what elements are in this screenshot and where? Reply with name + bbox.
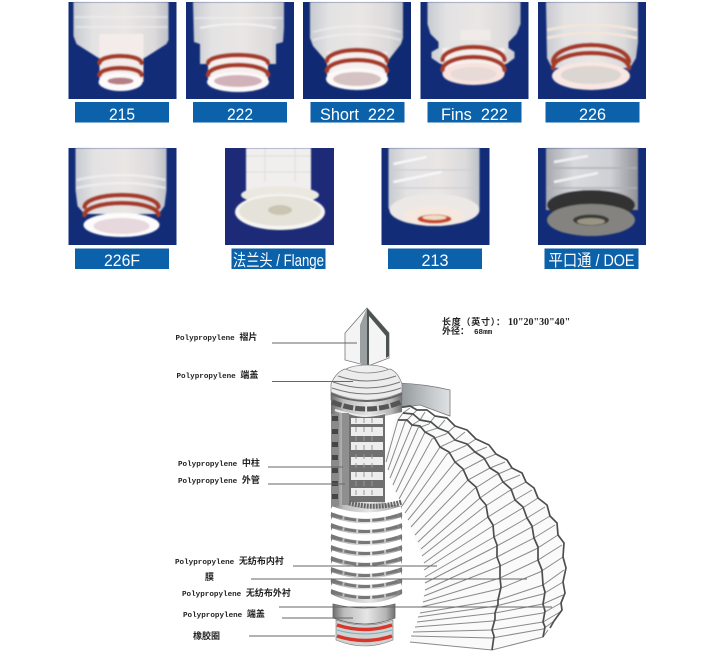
fin tip xyxy=(345,308,389,366)
photo: 226F end cap xyxy=(68,148,176,245)
leader lines xyxy=(249,343,552,636)
label: membrane: 膜 xyxy=(205,570,214,583)
label: 215: 215 xyxy=(109,106,135,124)
label: top end cap: Polypropylene 端盖 xyxy=(176,368,258,381)
label: 222 xyxy=(193,102,287,124)
label: 226F: 226F xyxy=(104,252,140,270)
label: Flange xyxy=(232,248,326,270)
label: 215 xyxy=(75,102,169,124)
photo: Fins 222 end cap xyxy=(420,2,528,99)
label: 226 xyxy=(546,102,640,124)
photo: 213 end cap xyxy=(382,148,490,245)
cage stripes xyxy=(331,502,402,598)
specification note: 68mm xyxy=(474,329,493,337)
cartridge core xyxy=(331,308,402,646)
cutaway center core xyxy=(349,414,385,502)
label: 226: 226 xyxy=(579,106,606,124)
label: 213: 213 xyxy=(422,252,448,270)
o-rings xyxy=(336,620,393,646)
label: Fins 222 xyxy=(428,102,522,124)
specification note xyxy=(442,315,570,337)
specification note: 10"20"30"40" xyxy=(508,317,570,328)
label: Flange: 法兰头 / Flange xyxy=(233,251,324,270)
label: center core: Polypropylene 中柱 xyxy=(178,456,260,469)
label: outer tube: Polypropylene 外管 xyxy=(178,473,260,486)
label: 226F xyxy=(75,248,169,270)
pleated fan xyxy=(385,406,566,650)
photo: 226 end cap xyxy=(538,2,646,99)
label: Short 222 xyxy=(310,102,404,124)
label: 213 xyxy=(388,248,482,270)
pleated sheet: gray backing xyxy=(398,383,450,416)
outer cage body xyxy=(331,392,402,603)
label: bottom end cap: Polypropylene 端盖 xyxy=(183,607,265,620)
photo: Flange end cap xyxy=(225,148,334,245)
bottom end cap xyxy=(333,604,395,624)
photo: 222 end cap xyxy=(186,2,294,99)
label: Fins 222: Fins 222 xyxy=(441,106,508,124)
photo: 215 end cap xyxy=(68,2,176,99)
label: DOE: 平口通 / DOE xyxy=(548,251,634,270)
label: 222: 222 xyxy=(227,106,253,124)
label: Short 222: Short 222 xyxy=(320,106,395,124)
diagram: filter cartridge structure xyxy=(331,308,566,650)
specification note: 外径： xyxy=(442,324,469,337)
label: inner nonwoven liner: Polypropylene 无纺布内衬 xyxy=(175,554,284,567)
top end cap xyxy=(331,365,402,400)
specification note: 长度（英寸）： xyxy=(442,315,505,328)
photo: DOE end cap xyxy=(538,148,646,245)
photo: Short 222 end cap xyxy=(303,2,411,99)
label: fin: Polypropylene 褶片 xyxy=(176,330,257,343)
label: outer nonwoven liner: Polypropylene 无纺布外衬 xyxy=(182,586,291,599)
label: rubber o-ring: 橡胶圈 xyxy=(193,629,220,642)
